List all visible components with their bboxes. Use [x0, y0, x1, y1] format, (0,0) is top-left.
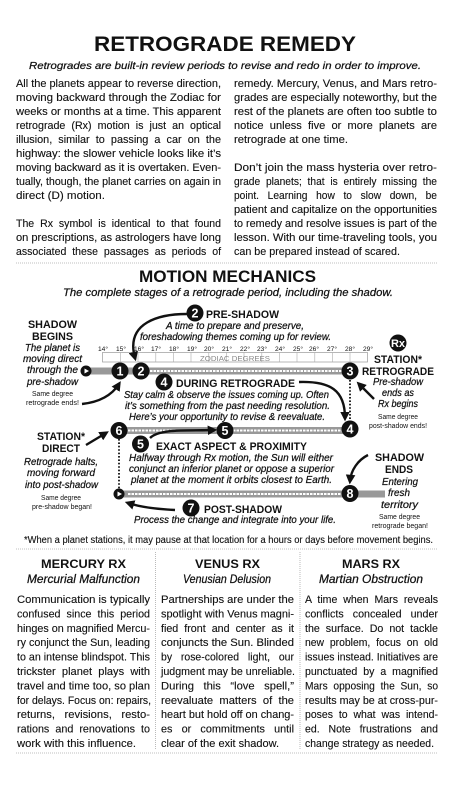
mars body text: issues instead. Initiatives are	[305, 652, 438, 664]
motion track: post-shadow	[119, 490, 385, 498]
zodiac degree scale: 20°	[204, 345, 214, 353]
intro text: right column: point. Learning how to slow down, be	[234, 190, 437, 202]
callout: shadow begins: BEGINS	[32, 331, 73, 343]
marker 8: 8	[347, 487, 354, 501]
mercury body text: rations and renovations to	[17, 724, 150, 736]
callout: shadow begins: moving direct	[23, 353, 83, 365]
callout: during retrograde stage	[124, 374, 330, 423]
marker 1: 1	[117, 364, 124, 378]
zodiac degree scale: ZODIAC DEGREES	[200, 354, 270, 363]
callout: during retrograde stage: DURING RETROGRADE	[176, 378, 295, 390]
callout: station retrograde	[362, 334, 434, 430]
callout: shadow ends: SHADOW	[375, 452, 425, 464]
arrow: pre-shadow to 2	[133, 314, 187, 358]
dotted connector: 6 to post-shadow	[118, 439, 120, 489]
play marker: track start	[80, 366, 92, 376]
callout: during retrograde stage: it’s something from the past needing resolution.	[125, 400, 330, 412]
mars body text: new problem, focus on old	[305, 637, 438, 649]
callout: shadow begins: SHADOW	[28, 319, 78, 331]
zodiac degree scale: 17°	[151, 345, 161, 353]
motion track: pre-shadow and retrograde start	[86, 368, 350, 374]
callout: during retrograde stage: 4	[161, 376, 168, 390]
callout: shadow ends: retrograde began!	[372, 521, 428, 530]
mercury body text: ry conjunct the Sun, leading	[17, 637, 150, 649]
arrow: post-shadow to track	[128, 503, 175, 510]
callout: station direct: moving forward	[27, 467, 96, 479]
callout: station retrograde: Rx	[391, 338, 406, 350]
venus body text: Partnerships are under the	[161, 594, 294, 606]
callout: post-shadow stage	[134, 500, 336, 526]
intro text: right column: notice unless five or more planets are	[234, 120, 437, 132]
mars body text: punctuated by a magnified	[305, 666, 438, 678]
intro text: right column: lesson. With our time-traveling tools, you	[234, 232, 437, 244]
mars body text: ed. Note frustrations and	[305, 724, 438, 736]
venus body text: reevaluate matters of the	[161, 695, 294, 707]
arrow: shadow begins to 1	[82, 384, 119, 404]
intro text: left column: moving backward as it is overtaken. Even-	[16, 162, 221, 174]
marker 4: 4	[347, 422, 354, 436]
callout: station direct: DIRECT	[42, 443, 80, 455]
intro text: left column: moving backward through the Zodiac for	[16, 92, 222, 104]
mars body text: A time when Mars reveals	[305, 594, 438, 606]
mercury body text: to an intense blindspot. This	[17, 652, 150, 664]
intro text: left column: associated these passages as periods of	[16, 246, 221, 258]
marker 5	[216, 422, 234, 439]
callout: station retrograde: Rx begins	[378, 398, 419, 410]
callout: station retrograde: Same degree	[378, 412, 418, 421]
zodiac degree scale: 21°	[222, 345, 232, 353]
intro text: left column: All the planets appear to reverse direction,	[16, 78, 221, 90]
mercury body text: confused since this period	[17, 608, 150, 620]
callout: shadow begins: Same degree	[32, 389, 73, 398]
play marker: post-shadow start	[114, 488, 124, 500]
zodiac degree scale: 28°	[345, 345, 355, 353]
callout: shadow begins: The planet is	[25, 342, 81, 354]
intro text: left column: tually, though, the planet carries on again in	[16, 176, 221, 188]
callout: pre-shadow stage	[140, 304, 331, 343]
zodiac degree scale: 15°	[116, 345, 126, 353]
intro text: right column: retrograde at one time.	[234, 134, 348, 146]
marker 3: 3	[347, 364, 354, 378]
intro text: right column: grade planets; that is entirely missing the	[234, 176, 437, 188]
callout: exact aspect stage: 5	[137, 438, 144, 452]
intro text: left column: on prescriptions, as astrologers have long	[16, 232, 221, 244]
marker 6: 6	[116, 424, 123, 438]
footnote: *When a planet stations, it may pause at that location for a hours or days before movement begins.	[24, 535, 433, 546]
venus body text: judgment may be unreliable.	[160, 666, 295, 678]
zodiac degree scale: 27°	[327, 345, 337, 353]
callout: shadow begins: pre-shadow	[26, 376, 79, 388]
marker 5: 5	[222, 424, 229, 438]
intro text: left column: direct (D) motion.	[16, 190, 105, 202]
intro text: left column: highway: the slower vehicle looks like it’s	[16, 148, 221, 160]
callout: shadow begins: through the	[27, 364, 78, 376]
callout: pre-shadow stage: A time to prepare and preserve,	[165, 320, 304, 332]
panel: mars rx	[305, 557, 438, 750]
zodiac degree scale: 14°	[98, 345, 108, 353]
callout: post-shadow stage: Process the change and integrate into your life.	[134, 514, 336, 526]
callout: shadow ends: Entering	[382, 476, 418, 488]
callout: station retrograde: ends as	[382, 387, 415, 399]
mercury body text: hinges on magnified Mercu-	[17, 623, 150, 635]
callout: pre-shadow stage: foreshadowing themes coming up for review.	[140, 331, 331, 343]
intro text: right column: grades are especially noteworthy, but the	[234, 92, 437, 104]
zodiac degree scale: 26°	[309, 345, 319, 353]
marker 6	[110, 422, 128, 439]
callout: exact aspect stage	[129, 436, 334, 486]
callout: shadow ends	[372, 452, 428, 530]
venus body text: es or commitments until	[161, 724, 294, 736]
motion track: retrograde to station direct	[119, 427, 350, 434]
intro text: right column: Don’t join the mass hysteria over retro-	[234, 162, 438, 174]
callout: shadow begins	[23, 319, 83, 407]
mercury body text: trickster planet plays with	[17, 666, 150, 678]
callout: during retrograde stage: Here’s your opportunity to revise & reevaluate.	[129, 411, 325, 423]
intro text: left column	[15, 78, 222, 258]
callout: station retrograde: RETROGRADE	[362, 366, 434, 378]
venus body text: spotlight with Venus magni-	[161, 608, 294, 620]
mars body text: the surface. Do not tackle	[305, 623, 438, 635]
intro text: right column: rest of the planets are often too subtle to	[234, 106, 437, 118]
callout: shadow ends: territory	[381, 499, 419, 511]
intro text: left column: weeks or months at a time. This apparent	[15, 106, 221, 118]
callout: exact aspect stage: planet at the moment it orbits closest to Earth.	[130, 474, 332, 486]
motion mechanics subtitle: The complete stages of a retrograde period, including the shadow.	[63, 287, 393, 299]
mars body text: results may be at cross-pur-	[305, 695, 438, 707]
callout: shadow ends: fresh	[388, 487, 410, 499]
callout: station direct: Retrograde halts,	[24, 456, 98, 468]
mercury body text: Communication is typically	[17, 594, 151, 606]
mars body text: Mars opposing the Sun, so	[305, 680, 438, 692]
marker 1	[112, 362, 128, 380]
dotted connector: station retrograde to 4	[349, 380, 351, 421]
heading: motion mechanics: MOTION MECHANICS	[139, 268, 316, 286]
mars body text: poses to what was intend-	[305, 709, 438, 721]
callout: shadow ends: Same degree	[379, 512, 420, 521]
mercury body text: travel and time too, so plan	[17, 680, 150, 692]
zodiac degree scale: 24°	[275, 345, 285, 353]
venus body text	[160, 594, 295, 750]
mercury body text: work with this influence.	[16, 738, 136, 750]
callout: station retrograde: STATION*	[374, 354, 423, 366]
zodiac degree scale: 29°	[363, 345, 373, 353]
callout: post-shadow stage: POST-SHADOW	[204, 504, 283, 516]
marker 2: 2	[138, 364, 145, 378]
venus body text: fied front and center as it	[161, 623, 294, 635]
marker 4	[342, 420, 358, 438]
zodiac degree scale: 25°	[293, 345, 303, 353]
mars body text: conflicts concealed under	[305, 608, 438, 620]
panel: mercury rx	[16, 557, 151, 750]
intro text: left column: The Rx symbol is identical to that found	[16, 218, 221, 230]
marker 2	[132, 362, 150, 380]
callout: station direct: STATION*	[37, 431, 86, 443]
mars heading: MARS RX	[342, 557, 400, 571]
zodiac degree scale: 22°	[240, 345, 250, 353]
arrow: during retrograde to 4	[299, 382, 345, 418]
venus body text: During this “love spell,”	[161, 680, 294, 692]
venus body text: by rose-colored light, our	[161, 652, 294, 664]
intro text: left column: illusion, similar to passing a car on the	[16, 134, 221, 146]
mars body text	[305, 594, 438, 750]
marker 3	[342, 362, 358, 380]
mars subtitle: Martian Obstruction	[319, 574, 423, 586]
callout: shadow begins: retrograde ends!	[26, 398, 79, 407]
callout: exact aspect stage: Halfway through Rx motion, the Sun will either	[129, 452, 333, 464]
venus heading: VENUS RX	[195, 557, 260, 571]
callout: exact aspect stage: EXACT ASPECT & PROXIMITY	[156, 441, 308, 453]
callout: shadow ends: ENDS	[385, 464, 413, 476]
callout: pre-shadow stage: 2	[192, 306, 199, 320]
callout: station retrograde: Pre-shadow	[373, 376, 424, 388]
venus body text: conjuncts the Sun. Blinded	[161, 637, 294, 649]
mars body text: change strategy as needed.	[305, 738, 434, 750]
intro text: right column: remedy. Mercury, Venus, and Mars retro-	[234, 78, 437, 90]
intro text: right column	[234, 78, 438, 258]
callout: station retrograde: post-shadow ends!	[369, 421, 427, 430]
mercury body text: for delays. Focus on: repairs,	[17, 695, 151, 707]
intro text: right column: to remedy and resolve issues is part of the	[234, 218, 437, 230]
zodiac degree scale: 23°	[257, 345, 267, 353]
intro text: left column: retrograde (Rx) motion is just an optical	[16, 120, 221, 132]
arrow: station retrograde to 3	[359, 384, 374, 399]
marker 8	[342, 485, 358, 502]
mercury body text	[16, 594, 151, 750]
arrow: exact aspect to 5	[150, 430, 214, 438]
zodiac degree scale: 16°	[134, 345, 144, 353]
subtitle: Retrogrades are built-in review periods to revise and redo in order to improve.	[29, 60, 421, 72]
intro text: right column: can be prepared instead of scared.	[234, 246, 400, 258]
zodiac degree scale: 19°	[187, 345, 197, 353]
venus body text: heart but hold off on chang-	[161, 709, 294, 721]
mercury subtitle: Mercurial Malfunction	[27, 574, 140, 586]
panel: venus rx	[160, 557, 295, 750]
title: RETROGRADE REMEDY	[94, 33, 356, 56]
callout: exact aspect stage: conjunct an inferior planet or oppose a superior	[129, 463, 334, 475]
zodiac degree scale	[98, 345, 373, 363]
callout: post-shadow stage: 7	[188, 502, 195, 516]
callout: station direct	[24, 431, 99, 511]
venus body text: clear of the exit shadow.	[161, 738, 279, 750]
zodiac degree scale: 18°	[169, 345, 179, 353]
callout: during retrograde stage: Stay calm & observe the issues coming up. Often	[124, 389, 329, 401]
intro text: right column: patient and capitalize on the opportunities	[234, 204, 437, 216]
mercury body text: returns, revisions, resto-	[17, 709, 150, 721]
callout: station direct: pre-shadow began!	[32, 502, 92, 511]
venus subtitle: Venusian Delusion	[183, 574, 271, 586]
callout: station direct: into post-shadow	[25, 479, 99, 491]
mercury heading: MERCURY RX	[41, 557, 126, 571]
callout: station direct: Same degree	[41, 493, 81, 502]
arrow: shadow ends to 8	[350, 455, 368, 481]
callout: pre-shadow stage: PRE-SHADOW	[206, 309, 280, 321]
arrow: station direct to 6	[86, 433, 106, 445]
